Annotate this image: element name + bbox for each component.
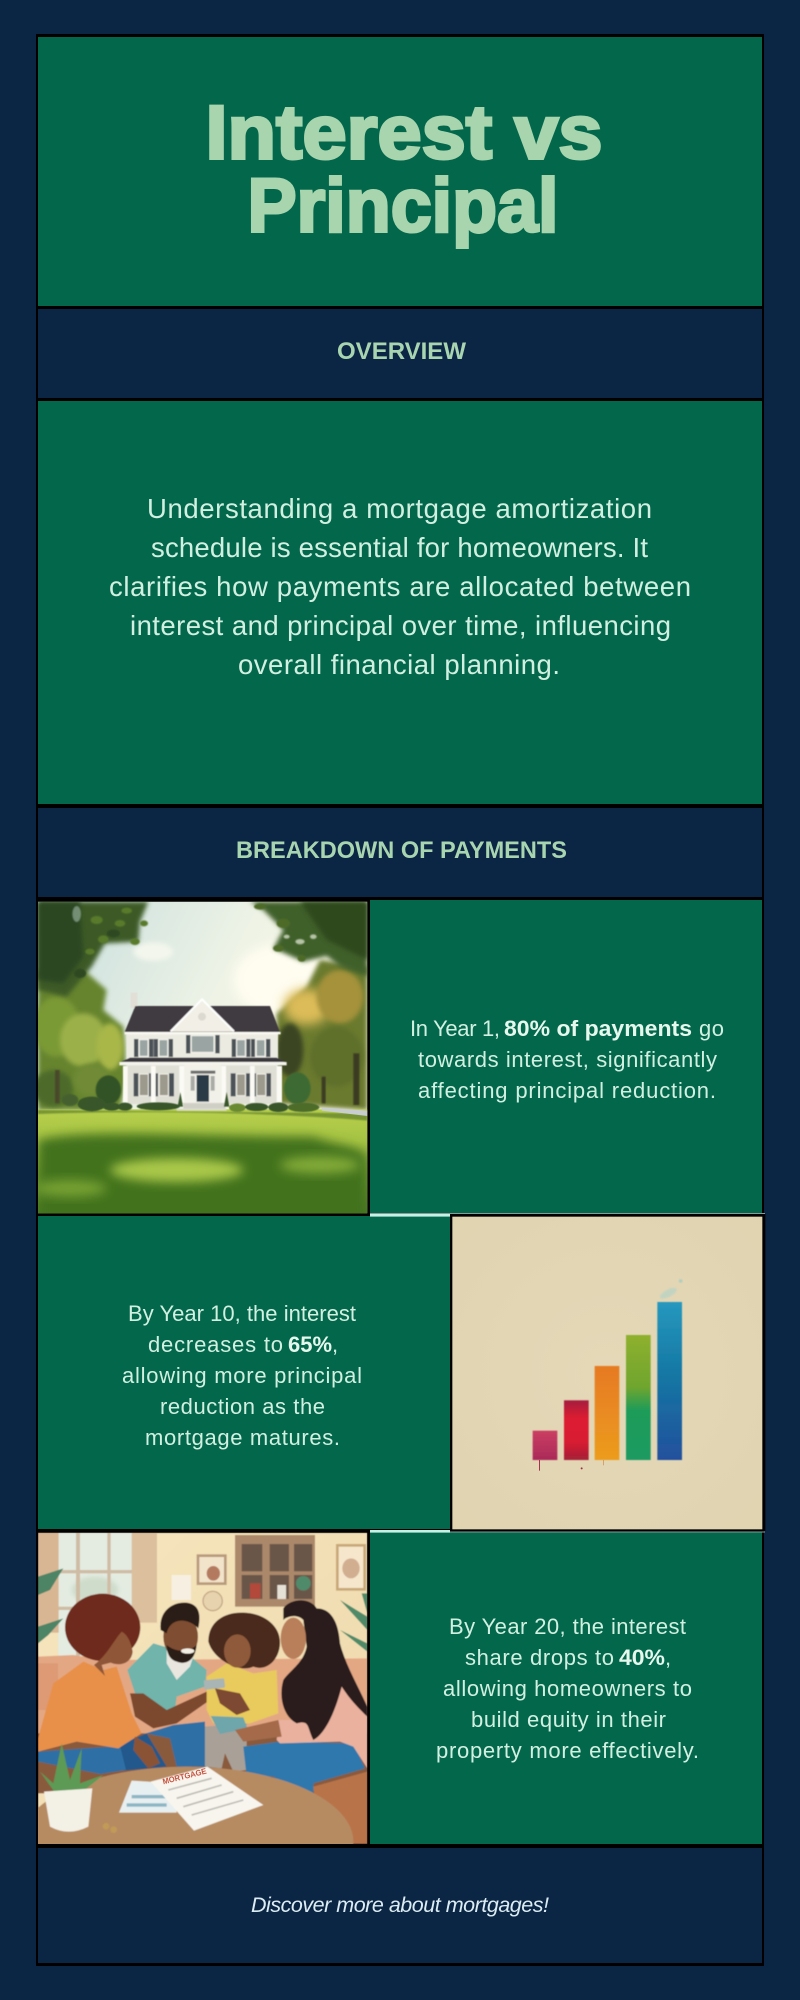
year 20 paragraph xyxy=(436,1614,699,1763)
plant xyxy=(40,1743,103,1795)
year 20 paragraph: build equity in their xyxy=(471,1707,666,1732)
year 20 paragraph: allowing homeowners to xyxy=(443,1676,692,1701)
wall decor xyxy=(197,1554,227,1585)
overview paragraph: interest and principal over time, influencing xyxy=(130,610,671,641)
year 10 paragraph: By Year 10, the interest xyxy=(128,1301,356,1326)
heading: breakdown of payments: BREAKDOWN OF PAYMENTS xyxy=(236,837,567,864)
year 1 paragraph: go xyxy=(699,1016,724,1041)
footer call to action: Discover more about mortgages! xyxy=(251,1893,549,1917)
year 10 paragraph: 65% xyxy=(288,1332,332,1357)
year 10 paragraph xyxy=(122,1301,362,1450)
year 10 paragraph: mortgage matures. xyxy=(145,1425,340,1450)
year 10 paragraph: , xyxy=(332,1332,338,1357)
year 10 paragraph: allowing more principal xyxy=(122,1363,362,1388)
person: orange sweater xyxy=(38,1594,167,1774)
panel: year 10 text xyxy=(38,1216,450,1529)
image: family reviewing a mortgage: MORTGAGE xyxy=(162,1766,208,1786)
year 20 paragraph: property more effectively. xyxy=(436,1738,699,1763)
house xyxy=(119,993,287,1111)
overview paragraph: overall financial planning. xyxy=(238,649,560,680)
left trees xyxy=(38,967,127,1110)
lawn xyxy=(38,1109,367,1213)
panel: year 20 text xyxy=(370,1532,762,1844)
heading: overview: OVERVIEW xyxy=(337,338,467,365)
row separators xyxy=(370,1213,765,1533)
panel: overview text xyxy=(38,401,762,804)
person: teal shirt xyxy=(127,1603,210,1767)
sofa xyxy=(38,1655,367,1733)
title xyxy=(206,90,602,248)
year 20 paragraph: share drops to xyxy=(465,1645,614,1670)
documents xyxy=(119,1781,177,1813)
person: yellow sweater xyxy=(204,1613,280,1772)
panel: title xyxy=(38,37,762,306)
year 1 paragraph: affecting principal reduction. xyxy=(418,1078,716,1103)
panel: footer xyxy=(38,1848,762,1963)
title: Principal xyxy=(248,164,558,248)
top foliage xyxy=(38,902,148,997)
overview paragraph: Understanding a mortgage amortization xyxy=(147,493,652,524)
year 20 paragraph: By Year 20, the interest xyxy=(449,1614,686,1639)
title: Interest vs xyxy=(206,90,602,176)
overview paragraph: clarifies how payments are allocated between xyxy=(109,571,691,602)
image: family reviewing a mortgage xyxy=(38,1532,368,1844)
coins xyxy=(103,1823,109,1830)
panel: overview heading xyxy=(38,309,762,398)
house plants xyxy=(38,1568,63,1643)
year 1 paragraph: 80% of payments xyxy=(504,1016,692,1041)
image: painted bar chart xyxy=(450,1214,765,1531)
panel: year 1 text xyxy=(370,900,762,1213)
bars xyxy=(533,1302,682,1460)
overview paragraph xyxy=(109,493,691,680)
year 10 paragraph: decreases to xyxy=(148,1332,283,1357)
year 20 paragraph: 40% xyxy=(619,1645,665,1670)
year 20 paragraph: , xyxy=(665,1645,671,1670)
window and curtains xyxy=(58,1533,132,1656)
year 1 paragraph xyxy=(410,1016,724,1103)
panel: breakdown heading xyxy=(38,808,762,897)
image: house on a lawn xyxy=(33,902,367,1227)
person: pink sweater xyxy=(235,1600,367,1793)
table xyxy=(38,1766,354,1844)
year 10 paragraph: reduction as the xyxy=(160,1394,325,1419)
overview paragraph: schedule is essential for homeowners. It xyxy=(151,532,648,563)
paint splatter xyxy=(658,1286,678,1301)
year 1 paragraph: towards interest, significantly xyxy=(418,1047,717,1072)
right trees xyxy=(277,960,367,1110)
shrubs xyxy=(78,1092,319,1112)
year 1 paragraph: In Year 1, xyxy=(410,1016,500,1041)
